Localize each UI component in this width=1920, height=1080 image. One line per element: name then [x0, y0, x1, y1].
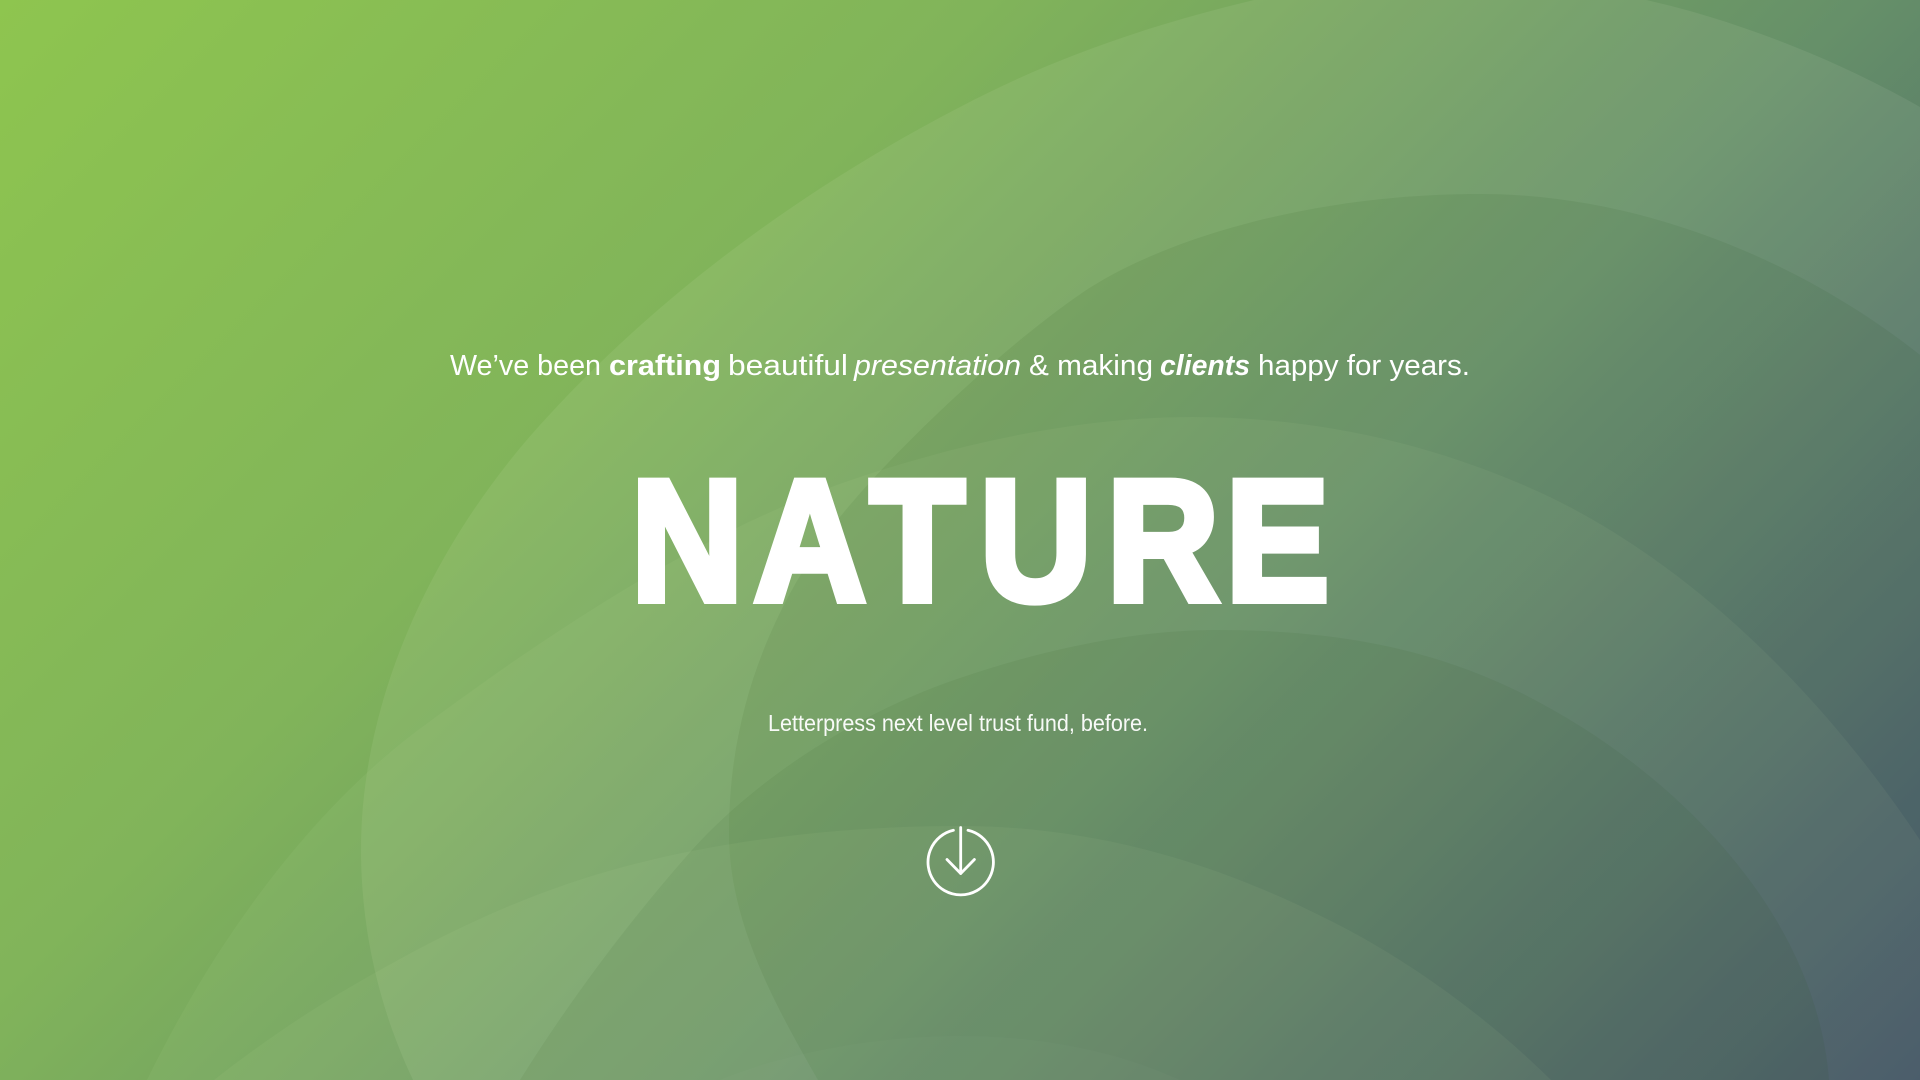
tagline: clients [1160, 350, 1250, 382]
title: NATURE [631, 444, 1329, 637]
tagline: happy for years. [1258, 350, 1470, 382]
background wave: faint bottom shape [720, 1036, 1180, 1080]
icon: download arrow in circle [928, 828, 993, 895]
tagline: & making [1029, 350, 1153, 382]
subtitle: Letterpress next level trust fund, before. [768, 710, 1148, 736]
background wave: bottom light shape [214, 826, 1551, 1080]
background wave: middle light shape [147, 417, 1920, 1080]
background wave: dark shape [729, 194, 1920, 1080]
background wave: lower dark shape [520, 630, 1829, 1080]
tagline: presentation [853, 350, 1021, 382]
tagline: crafting [609, 350, 721, 382]
tagline: beautiful [728, 350, 848, 382]
tagline: We’ve been [450, 350, 601, 382]
